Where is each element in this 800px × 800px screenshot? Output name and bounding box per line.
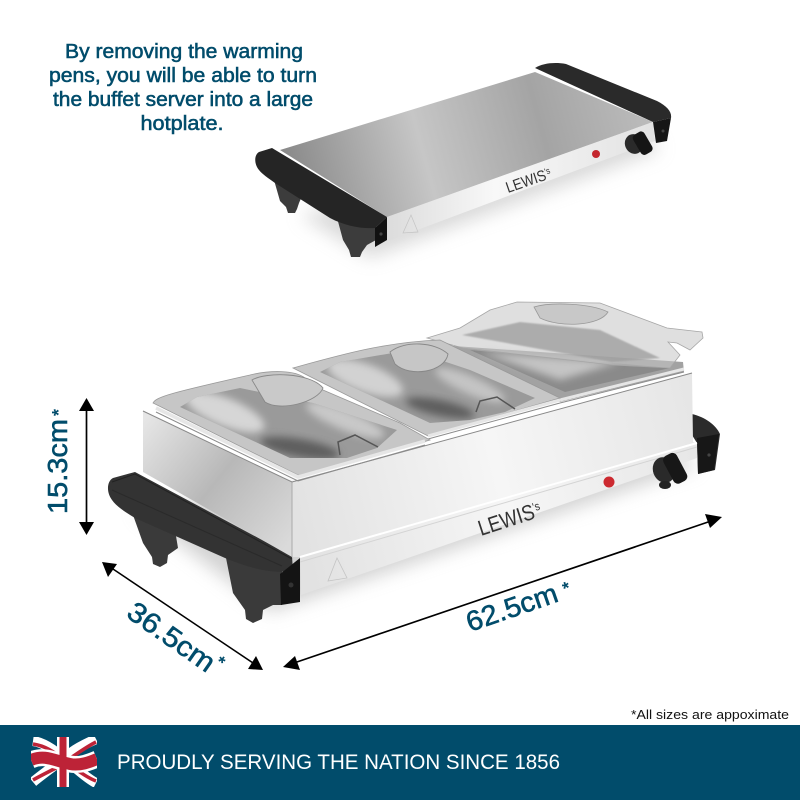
hotplate shadow xyxy=(300,125,660,258)
LEWIS's logo: 's xyxy=(531,499,542,514)
right black handle xyxy=(692,414,720,474)
icon: union flag xyxy=(31,737,97,787)
LEWIS's logo: LEWIS xyxy=(475,496,548,541)
heading: hotplate caption: the buffet server into a large xyxy=(53,89,313,111)
heading: hotplate caption xyxy=(49,41,317,135)
indicator light xyxy=(604,476,614,488)
third lid, raised xyxy=(427,302,703,368)
heading: hotplate caption: pens, you will be able to turn xyxy=(49,65,317,87)
left black handle xyxy=(108,472,300,605)
warning triangle xyxy=(328,558,347,581)
heading: hotplate caption: By removing the warming xyxy=(65,41,303,63)
left and front legs xyxy=(133,515,282,623)
LEWIS's logo: 's xyxy=(543,165,552,177)
product: buffet server xyxy=(108,302,720,623)
heading: hotplate caption: hotplate. xyxy=(140,113,224,135)
dimension: width arrow xyxy=(283,514,722,670)
second pan xyxy=(293,340,560,439)
dimension: height arrow xyxy=(79,398,94,535)
hotplate left legs xyxy=(274,180,376,257)
body front panel xyxy=(143,373,697,595)
control knob xyxy=(622,130,654,157)
product: hotplate xyxy=(255,63,671,258)
hotplate top surface xyxy=(280,72,653,217)
body left side xyxy=(143,411,292,557)
hotplate front strip xyxy=(387,122,655,241)
footnote: *All sizes are appoximate xyxy=(631,707,789,722)
third pan xyxy=(427,302,703,403)
asterisk: depth: * xyxy=(212,652,229,672)
dimension: depth arrow xyxy=(102,562,263,670)
LEWIS's logo: LEWIS xyxy=(504,165,555,197)
tagline: PROUDLY SERVING THE NATION SINCE 1856 xyxy=(117,751,560,774)
right black handle xyxy=(535,63,671,143)
dimension label: height: 15.3cm xyxy=(42,419,73,514)
footer band xyxy=(0,725,800,800)
left black handle xyxy=(255,148,387,247)
indicator light xyxy=(592,150,600,158)
asterisk: height: * xyxy=(49,409,69,416)
dimension label: depth: 36.5cm xyxy=(122,596,221,678)
asterisk: width: * xyxy=(560,578,573,599)
warning triangle xyxy=(403,215,418,233)
first pan xyxy=(153,372,430,481)
server shadow xyxy=(135,440,700,612)
control knob xyxy=(649,451,689,489)
dimension label: width: 62.5cm xyxy=(462,577,562,638)
